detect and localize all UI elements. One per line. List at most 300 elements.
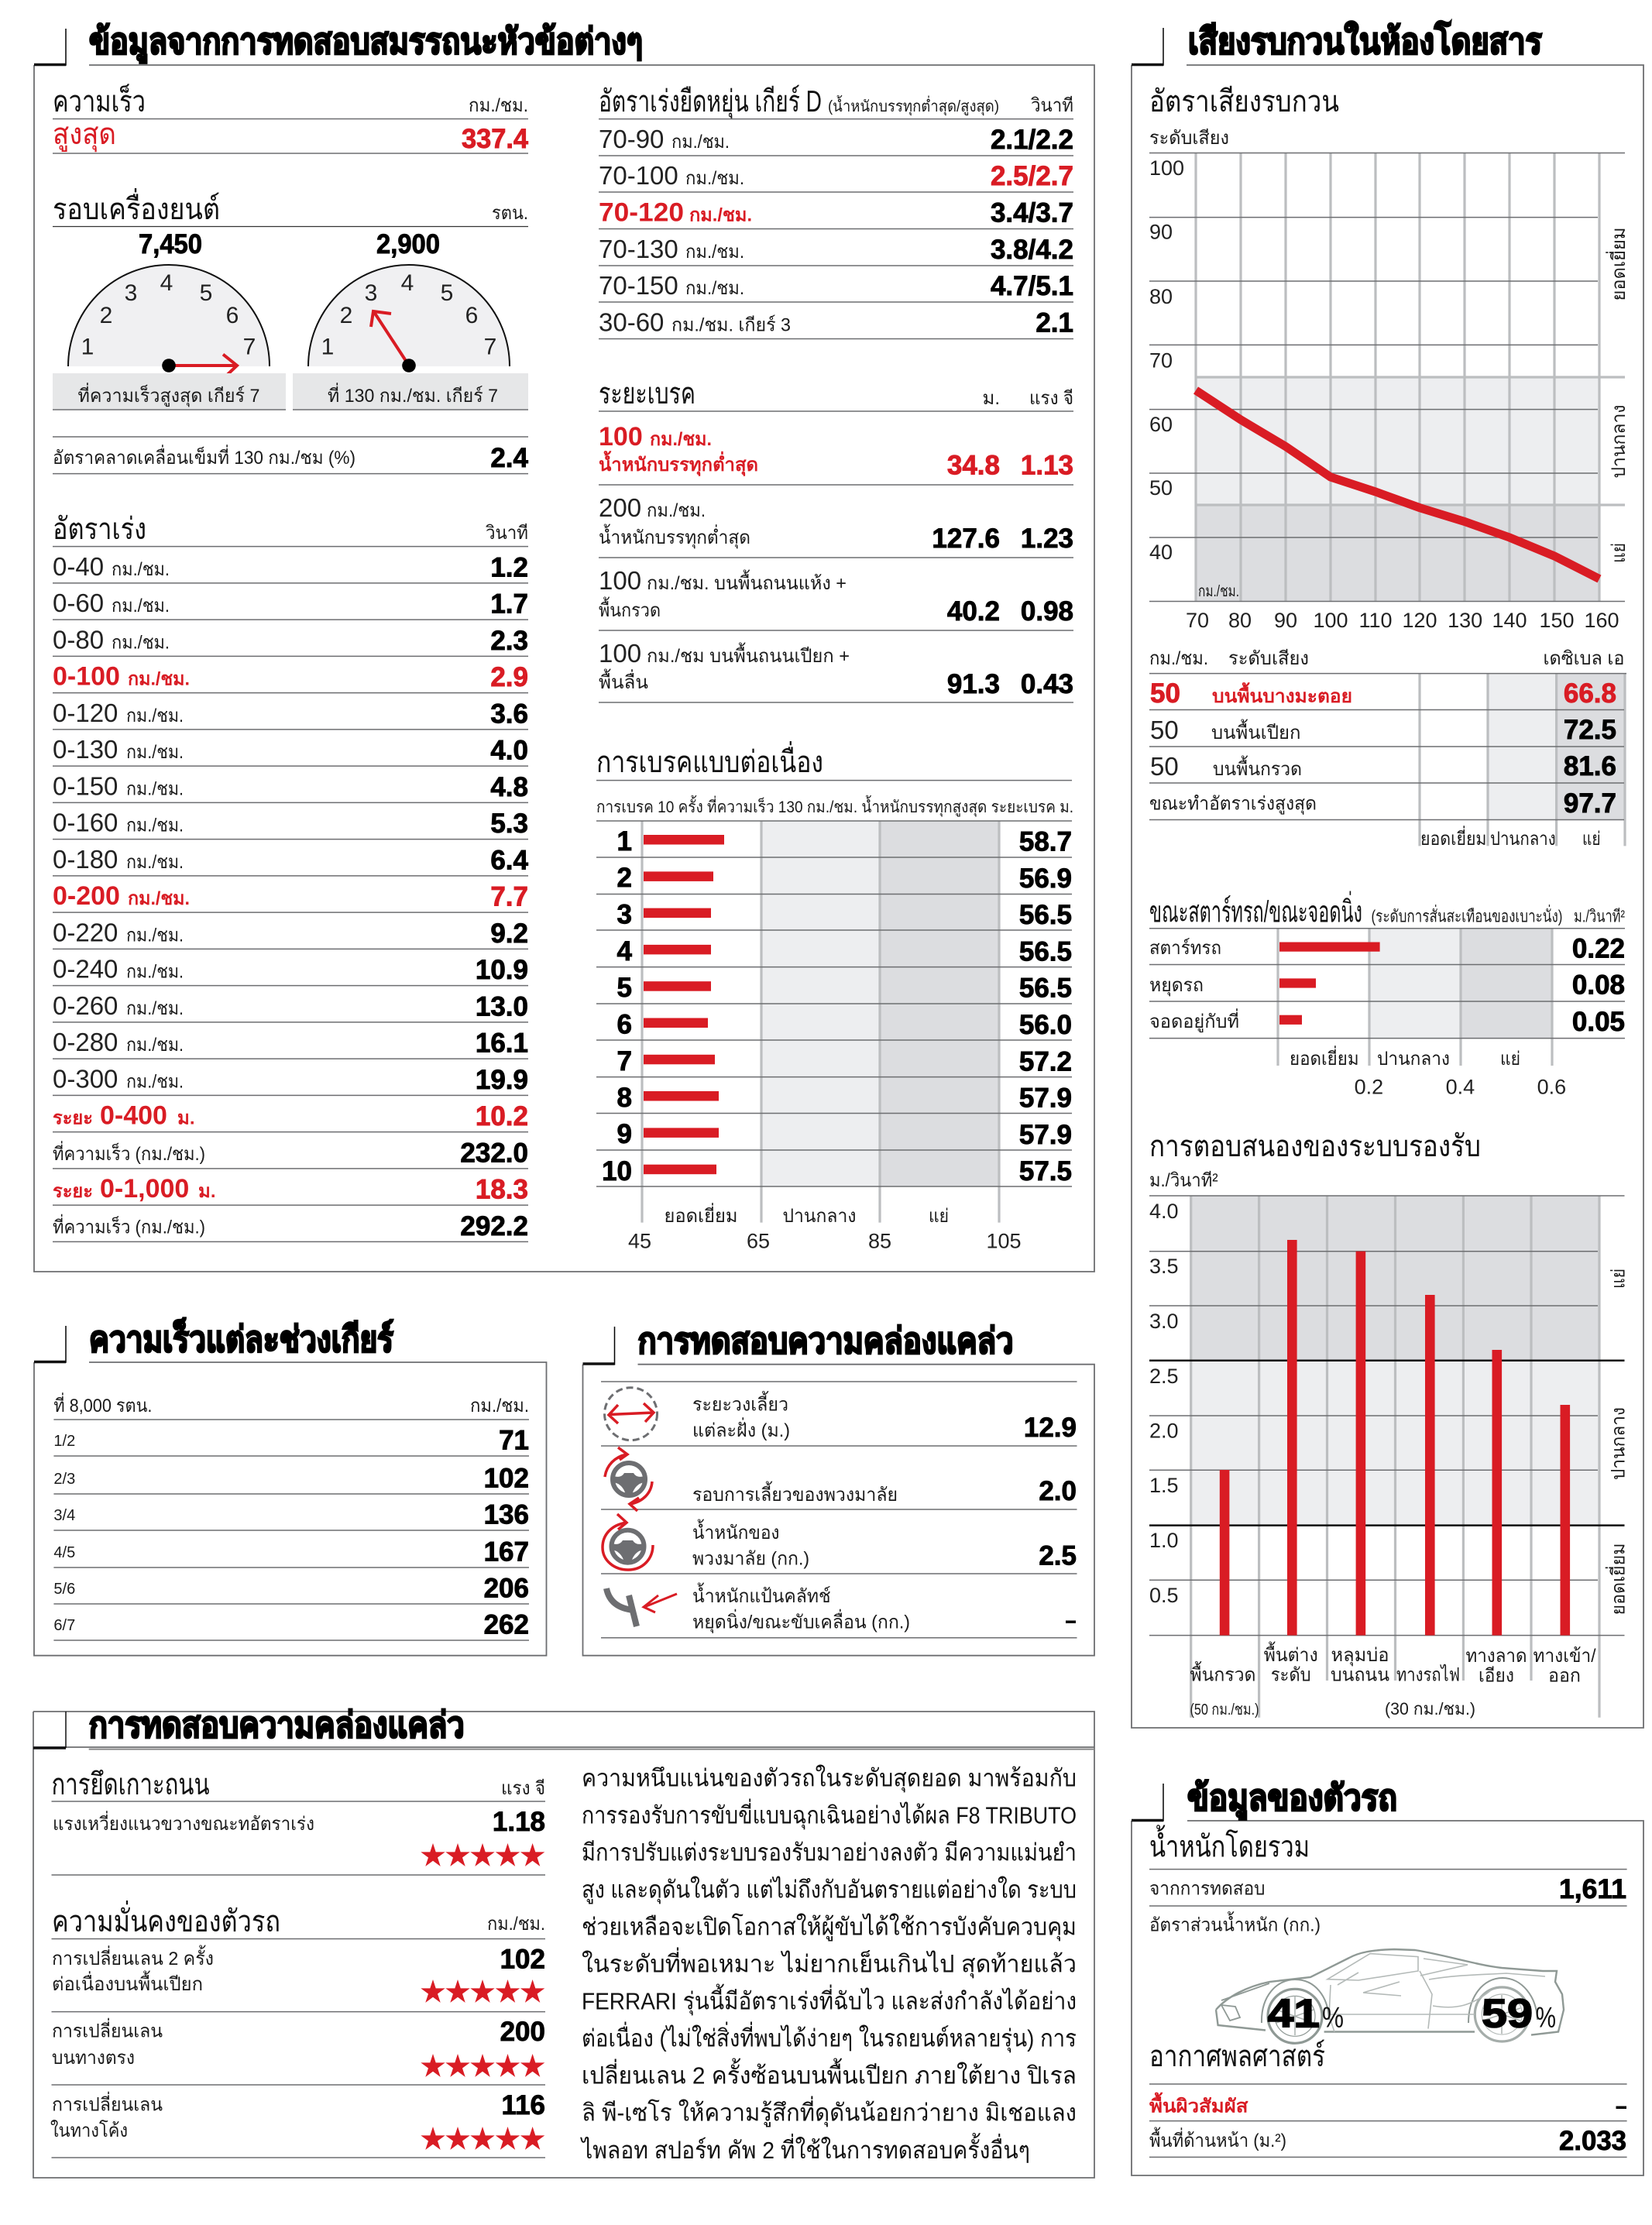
table: noise by condition — [1149, 648, 1626, 850]
row: turning circle: 12.9 — [1024, 1413, 1077, 1443]
table: noise by condition: 66.8 — [1564, 678, 1616, 709]
section: road grip: แรงเหวี่ยงแนวขวางขณะทอัตราเร่ง — [53, 1811, 314, 1835]
section: acceleration table: 0-180 — [53, 845, 118, 874]
section: engine speed gauges: รอบเครื่องยนต์ — [53, 188, 220, 226]
section: acceleration table: กม./ชม. — [126, 998, 184, 1019]
gauge: 2,900 rpm at 130 km/h: 1 — [321, 335, 334, 360]
gauge: 7,450 rpm at top speed: 5 — [200, 280, 212, 306]
section: flexible acceleration: กม./ชม. เกียร์ 3 — [671, 314, 791, 336]
chart: noise level line: 90 — [1274, 609, 1297, 632]
chart: seat vibration bars: 0.08 — [1572, 970, 1625, 1001]
chart: continuous braking bars: 10 — [602, 1156, 632, 1186]
chart: seat vibration bars: (ระดับการสั่นสะเทือนของเบาะนั่ง) — [1371, 905, 1563, 926]
gauge: 7,450 rpm at top speed: 4 — [160, 270, 173, 296]
chart: noise level line: 130 — [1448, 609, 1482, 632]
table: noise by condition: เดซิเบล เอ — [1543, 648, 1625, 669]
gauge: 2,900 rpm at 130 km/h: 4 — [401, 270, 414, 296]
table: noise by condition: ระดับเสียง — [1228, 648, 1309, 669]
chart: continuous braking bars: 58.7 — [1019, 827, 1072, 857]
section: flexible acceleration — [599, 84, 1073, 339]
table: noise by condition: แย่ — [1582, 829, 1601, 850]
text block: review paragraph: ช่วยเหลือจะเปิดโอกาสให้ผู้ขับได้ใช้การบังคับควบคุม — [582, 1913, 1077, 1942]
section: acceleration table: 292.2 — [460, 1211, 528, 1241]
section: flexible acceleration: อัตราเร่งยืดหยุ่น เกียร์ D — [599, 84, 822, 120]
illustration: car side view with weight split: % — [1322, 2001, 1344, 2034]
chart: continuous braking bars: 56.5 — [1019, 973, 1072, 1004]
section: acceleration table: 4.0 — [490, 736, 528, 766]
panel: speed per gear — [34, 1317, 547, 1656]
section: flexible acceleration: 2.1/2.2 — [991, 125, 1073, 155]
section: acceleration table: กม./ชม. — [126, 925, 184, 946]
panel: speed per gear: 102 — [484, 1464, 529, 1493]
section: acceleration table: กม./ชม. — [126, 962, 184, 983]
section: acceleration table: 0-240 — [53, 955, 118, 984]
panel: speed per gear: 206 — [484, 1574, 529, 1603]
section: flexible acceleration: (น้ำหนักบรรทุกต่ำสุด/สูงสุด) — [828, 95, 999, 116]
section: acceleration table: 19.9 — [476, 1065, 528, 1095]
chart: seat vibration bars: 0.22 — [1572, 934, 1625, 964]
section: acceleration table: อัตราเร่ง — [53, 513, 146, 546]
section: braking distance: 1.23 — [1021, 524, 1073, 554]
gauge: 2,900 rpm at 130 km/h: 2 — [340, 303, 352, 328]
section: acceleration table: 10.9 — [476, 955, 528, 985]
section: acceleration table: กม./ชม. — [112, 632, 170, 653]
section: total weight: 1,611 — [1559, 1874, 1626, 1904]
section: acceleration table: 6.4 — [490, 845, 529, 875]
section: braking distance: กม./ชม. บนพื้นถนนแห้ง + — [647, 569, 847, 594]
section: acceleration table: 0-120 — [53, 699, 118, 727]
section: flexible acceleration: 70-130 — [599, 235, 678, 263]
gauge: 7,450 rpm at top speed: 7 — [243, 335, 256, 360]
chart: suspension response bars: 3.5 — [1149, 1255, 1179, 1278]
chart: seat vibration bars: ยอดเยี่ยม — [1290, 1046, 1359, 1070]
chart: suspension response bars: 0.5 — [1149, 1584, 1179, 1607]
section: acceleration table — [53, 513, 529, 1241]
row: steering weight: 2.5 — [1039, 1541, 1077, 1571]
gauge: 7,450 rpm at top speed: 1 — [81, 335, 94, 360]
chart: noise level line: กม./ชม. — [1198, 583, 1239, 600]
text block: review paragraph: ลิ พี-เซโร ให้ความรู้สึกที่ดุดันน้อยกว่ายาง มิเชอแลง — [582, 2096, 1077, 2128]
row: steering turns — [692, 1476, 1077, 1506]
text block: review paragraph: การรองรับการขับขี่แบบฉุกเฉินอย่างได้ผล F8 TRIBUTO — [582, 1798, 1077, 1831]
section: aerodynamics: พื้นผิวสัมผัส — [1149, 2092, 1248, 2117]
section: braking distance: น้ำหนักบรรทุกต่ำสุด — [599, 524, 750, 549]
section: flexible acceleration: กม./ชม. — [685, 278, 744, 299]
table: noise by condition: 50 — [1150, 678, 1180, 709]
section: acceleration table: 0-60 — [53, 589, 104, 617]
row: turning circle: แต่ละฝั่ง (ม.) — [692, 1417, 790, 1441]
chart: continuous braking bars: 85 — [868, 1230, 891, 1253]
section: acceleration table: กม./ชม. — [128, 888, 190, 909]
title: noise in cabin: เสียงรบกวนในห้องโดยสาร — [1188, 20, 1542, 61]
chart: continuous braking bars: 6 — [617, 1010, 632, 1039]
section: acceleration table: ระยะ — [53, 1108, 93, 1129]
icon: clutch pedal — [606, 1588, 677, 1626]
row: clutch pedal weight: น้ำหนักแป้นคลัทช์ — [692, 1582, 831, 1607]
chart: continuous braking bars: 57.5 — [1019, 1156, 1072, 1186]
gauge: 2,900 rpm at 130 km/h: 3 — [365, 280, 377, 306]
section: acceleration table: 18.3 — [476, 1175, 528, 1205]
section: acceleration table: 0-150 — [53, 771, 118, 800]
section: braking distance: 91.3 — [947, 669, 1000, 699]
section: braking distance: 40.2 — [947, 596, 1000, 627]
chart: continuous braking bars: 45 — [628, 1230, 651, 1253]
section: vehicle stability: กม./ชม. — [487, 1914, 545, 1935]
panel: speed per gear: 71 — [499, 1426, 529, 1456]
chart: suspension response bars: แย่ — [1608, 1269, 1630, 1289]
section: acceleration table: ที่ความเร็ว (กม./ชม.) — [53, 1141, 205, 1165]
chart: suspension response bars: ยอดเยี่ยม — [1605, 1543, 1630, 1616]
section: braking distance: แรง จี — [1029, 388, 1073, 409]
chart: continuous braking bars: การเบรค 10 ครั้ง ที่ความเร็ว 130 กม./ชม. น้ำหนักบรรทุกสูงสุด ระยะเบรค ม. — [596, 795, 1073, 817]
section: road grip: 1.18 — [493, 1807, 545, 1837]
chart: noise level line: 100 — [1313, 609, 1348, 632]
illustration: car side view with weight split: 59 — [1482, 1992, 1533, 2037]
section: braking distance: พื้นลื่น — [599, 668, 648, 693]
section: vehicle stability: 116 — [502, 2090, 545, 2120]
chart: continuous braking bars — [596, 741, 1073, 1253]
panel: noise in cabin — [1132, 20, 1643, 1728]
chart: continuous braking bars: 4 — [617, 936, 633, 967]
text block: review paragraph: ต่อเนื่อง (ไม่ใช่สิ่งที่พบได้ง่ายๆ ในรถยนต์หลายรุ่น) การ — [582, 2021, 1077, 2054]
gauge: 7,450 rpm at top speed — [53, 229, 286, 410]
chart: continuous braking bars: 9 — [617, 1119, 632, 1149]
chart: noise level line: 90 — [1149, 221, 1173, 244]
table: noise by condition: 50 — [1150, 752, 1179, 781]
section: braking distance: 200 — [599, 493, 641, 522]
section: flexible acceleration: กม./ชม. — [689, 204, 752, 226]
section: acceleration table: 5.3 — [490, 809, 528, 839]
chart: seat vibration bars: 0.4 — [1446, 1075, 1475, 1098]
gauge: 7,450 rpm at top speed: ที่ความเร็วสูงสุด เกียร์ 7 — [77, 383, 260, 407]
chart: suspension response bars: ทางรถไฟ — [1396, 1664, 1460, 1686]
section: flexible acceleration: กม./ชม. — [685, 168, 744, 189]
section: road grip: การยึดเกาะถนน — [51, 1768, 209, 1801]
section: acceleration table: 0-100 — [53, 662, 120, 692]
section: acceleration table: 0-80 — [53, 625, 104, 654]
chart: noise level line: 110 — [1358, 609, 1393, 632]
section: acceleration table: ระยะ — [53, 1181, 93, 1202]
gauge: 7,450 rpm at top speed: 3 — [125, 280, 137, 306]
text block: review paragraph: ไพลอท สปอร์ท คัพ 2 ที่ใช้ในการทดสอบครั้งอื่นๆ — [579, 2133, 1030, 2164]
section: engine speed gauges: รตน. — [492, 203, 528, 224]
line: noise curve — [1196, 390, 1599, 579]
chart: suspension response bars: ออก — [1548, 1666, 1581, 1687]
title: car data: ข้อมูลของตัวรถ — [1187, 1777, 1397, 1820]
table: noise by condition: 97.7 — [1564, 788, 1616, 819]
section: braking distance: 100 — [599, 639, 641, 668]
chart: noise level line: 160 — [1584, 609, 1619, 632]
section: acceleration table: 13.0 — [476, 991, 528, 1022]
section: road grip: แรง จี — [501, 1778, 545, 1799]
chart: continuous braking bars: 56.5 — [1019, 936, 1072, 967]
section: flexible acceleration: 2.1 — [1036, 308, 1073, 338]
table: noise by condition: บนพื้นกรวด — [1213, 755, 1302, 780]
chart: noise level line: ระดับเสียง — [1149, 128, 1229, 149]
section: braking distance: กม./ชม บนพื้นถนนเปียก + — [647, 642, 850, 667]
section: acceleration table: 0-1,000 — [100, 1174, 189, 1203]
section: top speed: ความเร็ว — [53, 83, 146, 118]
section: acceleration table: ที่ความเร็ว (กม./ชม.) — [53, 1214, 205, 1238]
section: flexible acceleration: กม./ชม. — [671, 132, 730, 153]
chart: continuous braking bars: ปานกลาง — [782, 1206, 857, 1227]
chart: suspension response bars: ม./วินาที² — [1149, 1170, 1218, 1191]
gauge: 2,900 rpm at 130 km/h: 7 — [484, 335, 496, 360]
row: steering weight: น้ำหนักของ — [692, 1519, 779, 1543]
illustration: car side view with weight split: % — [1536, 2001, 1556, 2034]
gauge: 2,900 rpm at 130 km/h: 5 — [441, 280, 453, 306]
section: acceleration table: กม./ชม. — [126, 706, 184, 726]
section: acceleration table: กม./ชม. — [112, 596, 170, 616]
section: vehicle stability: การเปลี่ยนเลน — [52, 2018, 163, 2042]
chart: continuous braking bars: การเบรคแบบต่อเนื่อง — [596, 741, 823, 779]
chart: noise level line: อัตราเสียงรบกวน — [1149, 85, 1339, 118]
panel: speed per gear: 6/7 — [53, 1617, 75, 1634]
section: acceleration table: กม./ชม. — [126, 1035, 184, 1056]
section: braking distance: พื้นกรวด — [599, 596, 661, 621]
panel: speed per gear: 262 — [484, 1609, 529, 1640]
panel: speed per gear: ที่ 8,000 รตน. — [53, 1392, 152, 1416]
section: acceleration table: 0-160 — [53, 809, 118, 837]
section: acceleration table: 16.1 — [476, 1028, 528, 1059]
chart: noise level line: ปานกลาง — [1609, 404, 1630, 479]
chart: continuous braking bars: 56.0 — [1019, 1010, 1072, 1040]
section: aerodynamics: พื้นที่ด้านหน้า (ม.²) — [1149, 2127, 1286, 2151]
row: turning circle — [692, 1391, 1077, 1443]
chart: noise level line: 70 — [1186, 609, 1209, 632]
gauge: 2,900 rpm at 130 km/h: ที่ 130 กม./ชม. เกียร์ 7 — [328, 383, 498, 407]
panel: speed per gear: กม./ชม. — [470, 1396, 529, 1416]
chart: noise level line: 80 — [1228, 609, 1252, 632]
row: steering weight — [692, 1519, 1077, 1571]
chart: suspension response bars: 2.5 — [1149, 1365, 1179, 1388]
section: braking distance: ม. — [982, 388, 1000, 409]
chart: noise level line: ยอดเยี่ยม — [1606, 228, 1630, 300]
section: total weight: จากการทดสอบ — [1149, 1879, 1266, 1900]
chart: suspension response bars: บนถนน — [1331, 1665, 1389, 1686]
panel: car data — [1132, 1777, 1643, 2175]
gauge: 7,450 rpm at top speed: 2 — [100, 303, 112, 328]
section: top speed: กม./ชม. — [469, 95, 528, 116]
section: acceleration table: กม./ชม. — [126, 778, 184, 799]
section: flexible acceleration: กม./ชม. — [685, 242, 744, 263]
panel: grip and stability — [33, 1705, 1094, 2178]
section: acceleration table: 1.7 — [490, 589, 528, 620]
title: agility test: การทดสอบความคล่องแคล่ว — [638, 1320, 1013, 1361]
text block: review paragraph: ความหนึบแน่นของตัวรถในระดับสุดยอด มาพร้อมกับ — [582, 1764, 1077, 1794]
section: flexible acceleration: 70-100 — [599, 161, 678, 190]
title: speed per gear: ความเร็วแต่ละช่วงเกียร์ — [89, 1317, 393, 1359]
icon: steering wheel turns — [605, 1447, 652, 1511]
section: acceleration table: 10.2 — [476, 1101, 528, 1131]
section: acceleration table: 0-260 — [53, 991, 118, 1020]
chart: continuous braking bars: 56.5 — [1019, 900, 1072, 930]
panel: agility test — [582, 1320, 1094, 1656]
chart: seat vibration bars: ปานกลาง — [1377, 1049, 1450, 1070]
chart: suspension response bars: 3.0 — [1149, 1310, 1179, 1333]
section: engine speed gauges — [53, 188, 528, 410]
section: vehicle stability: การเปลี่ยนเลน 2 ครั้ง — [52, 1945, 214, 1969]
section: braking distance: 1.13 — [1021, 451, 1073, 480]
section: braking distance — [599, 377, 1073, 702]
chart: continuous braking bars: 56.9 — [1019, 864, 1072, 894]
section: vehicle stability: 102 — [500, 1944, 545, 1975]
row: steering turns: รอบการเลี้ยวของพวงมาลัย — [692, 1481, 898, 1506]
section: braking distance: น้ำหนักบรรทุกต่ำสุด — [599, 450, 758, 477]
section: vehicle stability: ต่อเนื่องบนพื้นเปียก — [52, 1970, 203, 1995]
section: braking distance: ระยะเบรค — [599, 377, 695, 410]
section: vehicle stability: ในทางโค้ง — [50, 2120, 128, 2141]
section: acceleration table: 2.9 — [490, 662, 528, 692]
chart: suspension response bars: หลุมบ่อ — [1331, 1645, 1389, 1667]
section: vehicle stability: บนทางตรง — [52, 2048, 135, 2069]
section: vehicle stability: 200 — [500, 2017, 545, 2047]
section: flexible acceleration: 2.5/2.7 — [991, 161, 1073, 191]
chart: suspension response bars: พื้นกรวด — [1190, 1661, 1256, 1686]
section: flexible acceleration: 3.8/4.2 — [991, 235, 1073, 265]
row: turning circle: ระยะวงเลี้ยว — [692, 1391, 788, 1416]
section: acceleration table: 0-400 — [100, 1101, 167, 1131]
section: acceleration table: 0-220 — [53, 918, 118, 946]
section: acceleration table: กม./ชม. — [126, 1071, 184, 1092]
row: clutch pedal weight: หยุดนิ่ง/ขณะขับเคลื่อน (กก.) — [692, 1609, 910, 1634]
chart: suspension response bars — [1149, 1130, 1630, 1719]
table: noise by condition: บนพื้นบางมะตอย — [1212, 682, 1352, 707]
chart: seat vibration bars: แย่ — [1500, 1049, 1520, 1070]
illustration: car side view with weight split — [1216, 1949, 1564, 2043]
chart: noise level line — [1149, 85, 1630, 632]
chart: seat vibration bars: 0.05 — [1572, 1007, 1625, 1037]
section: acceleration table: 0-280 — [53, 1028, 118, 1056]
panel: speed per gear: 3/4 — [53, 1507, 75, 1524]
chart: suspension response bars: 1.5 — [1149, 1474, 1179, 1497]
row: speedometer error — [53, 437, 529, 474]
section: acceleration table: กม./ชม. — [126, 742, 184, 763]
chart: seat vibration bars: 0.2 — [1355, 1075, 1383, 1098]
row: speedometer error: 2.4 — [490, 443, 529, 473]
section: top speed: 337.4 — [462, 124, 529, 154]
row: clutch pedal weight — [692, 1582, 1076, 1634]
panel: speed per gear: 2/3 — [53, 1471, 75, 1488]
text block: review paragraph: สูง และดุดันในตัว แต่ไม่ถึงกับอันตรายแต่อย่างใด ระบบ — [582, 1876, 1077, 1905]
section: acceleration table: ม. — [177, 1108, 195, 1129]
chart: continuous braking bars: ยอดเยี่ยม — [665, 1203, 737, 1227]
section: braking distance: 100 — [599, 566, 641, 595]
table: noise by condition: ขณะทำอัตราเร่งสูงสุด — [1149, 793, 1317, 815]
section: braking distance: กม./ชม. — [650, 429, 712, 450]
section: road grip — [51, 1768, 545, 1875]
section: acceleration table: 0-300 — [53, 1064, 118, 1093]
text block: review paragraph: มีการปรับแต่งระบบรองรับมาอย่างลงตัว มีความแม่นยำ — [582, 1839, 1077, 1866]
section: braking distance: 0.43 — [1021, 669, 1073, 699]
chart: noise level line: 120 — [1402, 609, 1437, 632]
table: noise by condition: 81.6 — [1564, 751, 1616, 781]
text block: review paragraph: เปลี่ยนเลน 2 ครั้งซ้อนบนพื้นเปียก ภายใต้ยาง ปิเรล — [582, 2058, 1077, 2089]
chart: continuous braking bars: 2 — [617, 863, 632, 893]
chart: suspension response bars: (50 กม./ชม.) — [1190, 1701, 1259, 1719]
section: acceleration table: กม./ชม. — [126, 852, 184, 873]
section: braking distance: 34.8 — [947, 451, 1000, 480]
chart: suspension response bars: ทางลาด — [1465, 1646, 1527, 1667]
section: acceleration table: กม./ชม. — [126, 815, 184, 836]
section: acceleration table: 7.7 — [490, 882, 528, 912]
section: aerodynamics — [1149, 2039, 1627, 2157]
table: noise by condition: บนพื้นเปียก — [1211, 719, 1301, 743]
chart: continuous braking bars: 57.9 — [1019, 1083, 1072, 1114]
section: flexible acceleration: 70-120 — [599, 198, 684, 228]
chart: seat vibration bars — [1149, 891, 1625, 1098]
gauge: 2,900 rpm at 130 km/h: 6 — [465, 303, 478, 328]
chart: suspension response bars: ระดับ — [1271, 1665, 1311, 1686]
section: vehicle stability: ความมั่นคงของตัวรถ — [52, 1901, 280, 1938]
chart: seat vibration bars: จอดอยู่กับที่ — [1149, 1008, 1239, 1033]
title: agility test (grip): การทดสอบความคล่องแคล่ว — [89, 1705, 465, 1745]
section: acceleration table: 2.3 — [490, 626, 528, 656]
text block: review paragraph: ในระดับที่พอเหมาะ ไม่ยากเย็นเกินไป สุดท้ายแล้ว — [582, 1947, 1077, 1979]
chart: suspension response bars: (30 กม./ชม.) — [1385, 1699, 1475, 1719]
panel: speed per gear: 136 — [484, 1499, 529, 1530]
section: acceleration table: ม. — [198, 1181, 215, 1202]
chart: continuous braking bars: 105 — [986, 1230, 1022, 1253]
section: total weight: น้ำหนักโดยรวม — [1149, 1825, 1310, 1863]
table: noise by condition: ยอดเยี่ยม — [1420, 826, 1487, 850]
chart: seat vibration bars: สตาร์ทรถ — [1149, 937, 1221, 959]
chart: suspension response bars: เอียง — [1479, 1666, 1514, 1687]
chart: seat vibration bars: หยุดรถ — [1149, 975, 1204, 997]
table: noise by condition: 72.5 — [1564, 715, 1616, 745]
chart: continuous braking bars: 57.9 — [1019, 1120, 1072, 1150]
section: flexible acceleration: 4.7/5.1 — [991, 271, 1073, 301]
chart: noise level line: 70 — [1149, 349, 1173, 372]
gauge: 7,450 rpm at top speed: 6 — [226, 303, 239, 328]
panel: speed per gear: 1/2 — [53, 1433, 75, 1450]
chart: continuous braking bars: 57.2 — [1019, 1046, 1072, 1076]
section: acceleration table: 1.2 — [490, 552, 528, 582]
title: performance test data: ข้อมูลจากการทดสอบสมรรถนะหัวข้อต่างๆ — [89, 21, 643, 64]
chart: suspension response bars: ปานกลาง — [1608, 1407, 1630, 1480]
chart: suspension response bars: ทางเข้า/ — [1534, 1646, 1596, 1667]
icon: turning circle — [604, 1388, 657, 1440]
section: top speed — [53, 83, 529, 154]
chart: suspension response bars: พื้นต่าง — [1264, 1641, 1318, 1666]
section: acceleration table: กม./ชม. — [128, 669, 190, 690]
text block: review paragraph — [579, 1764, 1077, 2164]
chart: noise level line: 50 — [1149, 476, 1173, 500]
chart: continuous braking bars: 1 — [617, 826, 632, 857]
chart: suspension response bars: 2.0 — [1149, 1420, 1179, 1443]
chart: suspension response bars: 1.0 — [1149, 1529, 1179, 1552]
row: steering turns: 2.0 — [1039, 1476, 1077, 1506]
chart: noise level line: 40 — [1149, 541, 1173, 564]
chart: continuous braking bars: 7 — [617, 1046, 632, 1076]
chart: continuous braking bars: แย่ — [929, 1206, 949, 1227]
gauge: 2,900 rpm at 130 km/h: 2,900 — [376, 229, 440, 259]
section: acceleration table: 0-130 — [53, 735, 118, 764]
section: vehicle stability: การเปลี่ยนเลน — [52, 2092, 163, 2116]
section: braking distance: 0.98 — [1021, 596, 1073, 627]
chart: noise level line: 60 — [1149, 413, 1173, 436]
chart: continuous braking bars: 65 — [747, 1230, 770, 1253]
section: acceleration table: 9.2 — [490, 918, 528, 949]
section: flexible acceleration: 30-60 — [599, 308, 664, 336]
section: acceleration table: 0-40 — [53, 552, 104, 581]
section: total weight: อัตราส่วนน้ำหนัก (กก.) — [1149, 1911, 1321, 1936]
gauge: 2,900 rpm at 130 km/h — [293, 229, 528, 410]
chart: continuous braking bars: 8 — [617, 1083, 632, 1113]
section: aerodynamics: อากาศพลศาสตร์ — [1149, 2039, 1325, 2073]
chart: noise level line: แย่ — [1609, 543, 1630, 563]
section: acceleration table: 0-200 — [53, 881, 120, 911]
